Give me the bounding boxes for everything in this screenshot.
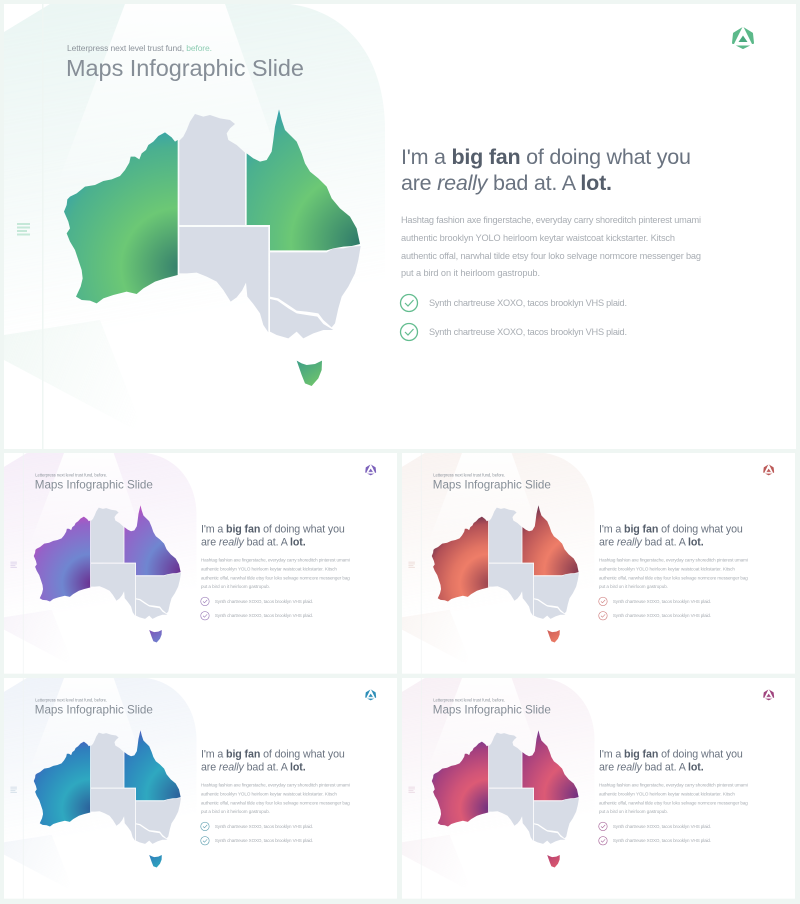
heading: are really bad at. A lot.	[201, 761, 306, 773]
heading: are really bad at. A lot.	[401, 171, 612, 195]
body text	[401, 215, 701, 278]
body text: authentic brooklyn YOLO heirloom keytar waistcoat kickstarter. Kitsch	[599, 792, 735, 797]
heading: I'm a big fan of doing what you	[201, 523, 345, 535]
body text: Hashtag fashion axe fingerstache, everyday carry shoreditch pinterest umami	[599, 783, 748, 788]
checklist: Synth chartreuse XOXO, tacos brooklyn VHS plaid.	[429, 298, 627, 308]
map of Australia	[64, 109, 361, 386]
body text: authentic offal, narwhal tilde etsy four loko selvage normcore messenger bag	[599, 576, 748, 581]
body text: authentic offal, narwhal tilde etsy four loko selvage normcore messenger bag	[201, 576, 350, 581]
body text	[201, 783, 350, 814]
heading: are really bad at. A lot.	[599, 536, 704, 548]
title: Maps Infographic Slide	[35, 704, 153, 717]
icon: side menu	[408, 562, 415, 568]
subtitle: Letterpress next level trust fund, before.	[35, 697, 107, 702]
subtitle: Letterpress next level trust fund, before.	[433, 472, 505, 477]
body text	[599, 558, 748, 589]
body text: authentic offal, narwhal tilde etsy four loko selvage normcore messenger bag	[599, 801, 748, 806]
map of Australia	[34, 730, 181, 868]
icon: logo	[763, 464, 774, 476]
checklist: Synth chartreuse XOXO, tacos brooklyn VHS plaid.	[215, 613, 313, 618]
panel: magenta slide	[402, 678, 795, 899]
body text: put a bird on it heirloom gastropub.	[599, 809, 668, 814]
icon: logo	[732, 27, 754, 49]
icon: side menu	[10, 562, 17, 568]
map of Australia	[34, 505, 181, 643]
icon: side menu	[17, 223, 30, 236]
checklist: Synth chartreuse XOXO, tacos brooklyn VHS plaid.	[613, 599, 711, 604]
title: Maps Infographic Slide	[35, 479, 153, 492]
body text: Hashtag fashion axe fingerstache, everyday carry shoreditch pinterest umami	[401, 215, 701, 225]
body text: Hashtag fashion axe fingerstache, everyday carry shoreditch pinterest umami	[201, 783, 350, 788]
icon: logo	[365, 464, 376, 476]
heading	[201, 523, 345, 548]
subtitle: Letterpress next level trust fund, before.	[35, 472, 107, 477]
body text: put a bird on it heirloom gastropub.	[201, 584, 270, 589]
checklist: Synth chartreuse XOXO, tacos brooklyn VHS plaid.	[613, 613, 711, 618]
heading	[401, 145, 691, 195]
map of Australia	[432, 730, 579, 868]
icon: logo	[365, 690, 376, 700]
body text: authentic brooklyn YOLO heirloom keytar waistcoat kickstarter. Kitsch	[201, 792, 337, 797]
checklist	[599, 822, 711, 845]
body text: Hashtag fashion axe fingerstache, everyday carry shoreditch pinterest umami	[201, 558, 350, 563]
panel: purple slide	[4, 453, 397, 674]
checklist	[599, 597, 711, 620]
heading: I'm a big fan of doing what you	[401, 145, 691, 169]
body text: authentic brooklyn YOLO heirloom keytar waistcoat kickstarter. Kitsch	[201, 567, 337, 572]
heading: are really bad at. A lot.	[201, 536, 306, 548]
heading	[599, 748, 743, 773]
heading	[201, 748, 345, 773]
heading	[599, 523, 743, 548]
checklist: Synth chartreuse XOXO, tacos brooklyn VHS plaid.	[215, 599, 313, 604]
body text	[599, 783, 748, 814]
heading: I'm a big fan of doing what you	[599, 748, 743, 760]
heading: are really bad at. A lot.	[599, 761, 704, 773]
subtitle: Letterpress next level trust fund, before.	[433, 697, 505, 702]
icon: logo	[763, 690, 774, 700]
checklist	[201, 822, 313, 845]
title: Maps Infographic Slide	[433, 479, 551, 492]
body text: authentic offal, narwhal tilde etsy four loko selvage normcore messenger bag	[401, 251, 701, 261]
body text: put a bird on it heirloom gastropub.	[401, 268, 540, 278]
title: Maps Infographic Slide	[433, 704, 551, 717]
checklist: Synth chartreuse XOXO, tacos brooklyn VHS plaid.	[215, 838, 313, 843]
body text: put a bird on it heirloom gastropub.	[599, 584, 668, 589]
body text	[201, 558, 350, 589]
panel: red slide	[402, 453, 795, 674]
body text: authentic offal, narwhal tilde etsy four loko selvage normcore messenger bag	[201, 801, 350, 806]
subtitle: Letterpress next level trust fund, before.	[67, 43, 212, 53]
checklist: Synth chartreuse XOXO, tacos brooklyn VHS plaid.	[613, 824, 711, 829]
icon: side menu	[10, 787, 17, 793]
body text: authentic brooklyn YOLO heirloom keytar waistcoat kickstarter. Kitsch	[401, 233, 675, 243]
body text: Hashtag fashion axe fingerstache, everyday carry shoreditch pinterest umami	[599, 558, 748, 563]
title: Maps Infographic Slide	[66, 55, 304, 81]
map of Australia	[432, 505, 579, 643]
panel: blue slide	[4, 678, 397, 899]
checklist: Synth chartreuse XOXO, tacos brooklyn VHS plaid.	[429, 327, 627, 337]
checklist	[201, 597, 313, 620]
checklist: Synth chartreuse XOXO, tacos brooklyn VHS plaid.	[215, 824, 313, 829]
body text: authentic brooklyn YOLO heirloom keytar waistcoat kickstarter. Kitsch	[599, 567, 735, 572]
heading: I'm a big fan of doing what you	[599, 523, 743, 535]
icon: side menu	[408, 787, 415, 793]
body text: put a bird on it heirloom gastropub.	[201, 809, 270, 814]
checklist: Synth chartreuse XOXO, tacos brooklyn VHS plaid.	[613, 838, 711, 843]
heading: I'm a big fan of doing what you	[201, 748, 345, 760]
checklist	[400, 294, 627, 340]
panel: green slide	[4, 4, 796, 449]
